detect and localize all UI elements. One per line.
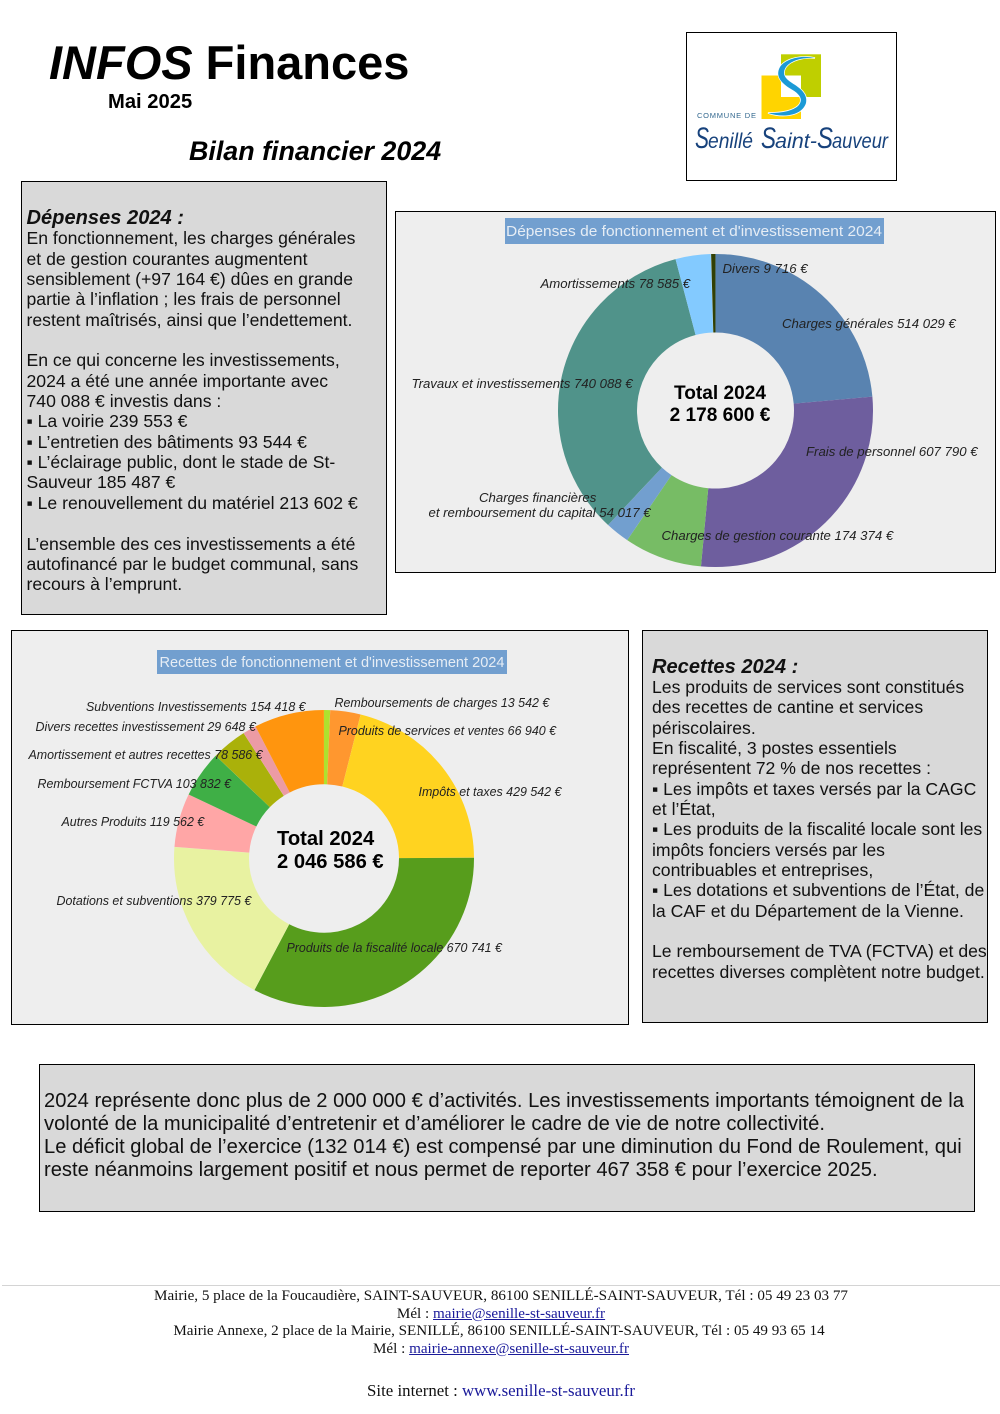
text: recettes: recettes diverses complètent notre budget.: [652, 962, 985, 982]
panel: recettes text: [642, 630, 988, 1023]
logo: aint-: [775, 130, 817, 153]
total: [670, 383, 771, 426]
labels: Frais de personnel 607 790 €: [806, 444, 978, 459]
text: dépenses: Sauveur 185 487 €: [26, 472, 175, 492]
logo: [686, 32, 897, 181]
text: dépenses: En fonctionnement, les charges générales: [26, 228, 355, 248]
panel: dépenses text: [21, 181, 387, 615]
labels: [28, 696, 563, 955]
labels: Amortissement et autres recettes 78 586 €: [28, 748, 264, 762]
text: dépenses: sensiblement (+97 164 €) dûes en grande: [26, 269, 353, 289]
footer: Mél : mairie-annexe@senille-st-sauveur.fr: [373, 1340, 629, 1356]
labels: Charges de gestion courante 174 374 €: [662, 528, 894, 543]
text: dépenses: ▪ L’entretien des bâtiments 93 544 €: [26, 432, 307, 452]
text: dépenses: ▪ La voirie 239 553 €: [26, 411, 187, 431]
text: recettes: des recettes de cantine et services: [652, 697, 923, 717]
total: 2 046 586 €: [277, 851, 384, 873]
footer: [154, 1287, 848, 1400]
text: dépenses: Dépenses 2024 :: [26, 207, 184, 229]
text: recettes: et l’État,: [652, 799, 716, 819]
text: recettes: contribuables et entreprises,: [652, 860, 873, 880]
total: 2 178 600 €: [670, 405, 771, 426]
total: Total 2024: [277, 828, 375, 850]
text: conclusion: Le déficit global de l’exercice (132 014 €) est compensé par une diminution du Fond de Roulement, qui: [44, 1136, 962, 1158]
text: recettes: la CAF et du Département de la Vienne.: [652, 901, 964, 921]
text: dépenses: ▪ Le renouvellement du matériel 213 602 €: [26, 493, 358, 513]
footer: Mairie, 5 place de la Foucaudière, SAINT-SAUVEUR, 86100 SENILLÉ-SAINT-SAUVEUR, Tél : 05 49 23 03 77: [154, 1288, 848, 1304]
text: dépenses: autofinancé par le budget communal, sans: [26, 554, 358, 574]
chart: dépenses: [395, 211, 996, 573]
logo: S: [695, 122, 709, 155]
footer: Site internet : www.senille-st-sauveur.fr: [367, 1380, 635, 1400]
labels: Charges financières: [479, 490, 597, 505]
text: dépenses: ▪ L’éclairage public, dont le stade de St-: [26, 452, 335, 472]
text: dépenses: En ce qui concerne les investissements,: [26, 350, 340, 370]
text: recettes: Les produits de services sont constitués: [652, 677, 964, 697]
title: INFOS Finances: [49, 36, 409, 89]
text: recettes: Le remboursement de TVA (FCTVA) et des: [652, 941, 987, 961]
labels: Charges générales 514 029 €: [782, 316, 956, 331]
donut: [165, 701, 483, 1016]
text: dépenses: et de gestion courantes augmentent: [26, 249, 307, 269]
labels: Produits de services et ventes 66 940 €: [338, 724, 557, 738]
labels: Impôts et taxes 429 542 €: [418, 785, 563, 799]
text: conclusion: [44, 1090, 964, 1181]
text: dépenses: L’ensemble des ces investissements a été: [26, 534, 355, 554]
text: recettes: périscolaires.: [652, 718, 756, 738]
labels: Amortissements 78 585 €: [540, 276, 691, 291]
labels: et remboursement du capital 54 017 €: [428, 505, 651, 520]
text: recettes: En fiscalité, 3 postes essentiels: [652, 738, 897, 758]
logo: S: [761, 122, 776, 155]
labels: Remboursements de charges 13 542 €: [334, 696, 550, 710]
chart title: [505, 218, 884, 244]
labels: Divers 9 716 €: [722, 261, 808, 276]
text: dépenses: restent maîtrisés, ainsi que l’endettement.: [26, 310, 352, 330]
text: recettes: Recettes 2024 :: [652, 656, 798, 678]
text: dépenses: 2024 a été une année importante avec: [26, 371, 328, 391]
logo: enillé: [708, 130, 753, 153]
text: dépenses: [26, 207, 358, 594]
chart title: Dépenses de fonctionnement et d'investissement 2024: [506, 224, 882, 240]
text: dépenses: recours à l’emprunt.: [26, 574, 182, 594]
subtitle: Bilan financier 2024: [189, 136, 441, 166]
text: dépenses: 740 088 € investis dans :: [26, 391, 221, 411]
logo: S: [817, 122, 833, 155]
labels: Divers recettes investissement 29 648 €: [36, 720, 257, 734]
donut: [549, 245, 882, 576]
text: dépenses: partie à l’inflation ; les frais de personnel: [26, 289, 341, 309]
chart title: [157, 650, 507, 674]
date: Mai 2025: [108, 91, 192, 113]
labels: Remboursement FCTVA 103 832 €: [38, 777, 232, 791]
labels: Travaux et investissements 740 088 €: [412, 376, 633, 391]
text: recettes: impôts fonciers versés par les: [652, 840, 885, 860]
labels: Subventions Investissements 154 418 €: [86, 700, 307, 714]
chart: recettes: [11, 630, 629, 1025]
text: conclusion: reste néanmoins largement positif et nous permet de reporter 467 358 € pour l’exercice 2025.: [44, 1159, 878, 1181]
text: recettes: ▪ Les dotations et subventions de l’État, de: [652, 880, 984, 900]
footer: Mél : mairie@senille-st-sauveur.fr: [397, 1306, 605, 1322]
text: recettes: ▪ Les impôts et taxes versés par la CAGC: [652, 779, 976, 799]
text: conclusion: 2024 représente donc plus de 2 000 000 € d’activités. Les investissements importants témoignent de la: [44, 1090, 964, 1112]
chart title: Recettes de fonctionnement et d'investissement 2024: [160, 655, 504, 671]
logo: COMMUNE DE: [697, 111, 756, 120]
labels: Autres Produits 119 562 €: [60, 815, 205, 829]
labels: Produits de la fiscalité locale 670 741 €: [286, 941, 503, 955]
text: recettes: [652, 656, 987, 982]
footer: Mairie Annexe, 2 place de la Mairie, SENILLÉ, 86100 SENILLÉ-SAINT-SAUVEUR, Tél : 05 49 93 65 14: [173, 1323, 825, 1339]
text: recettes: représentent 72 % de nos recettes :: [652, 758, 931, 778]
text: recettes: ▪ Les produits de la fiscalité locale sont les: [652, 819, 982, 839]
panel: conclusion: [39, 1064, 975, 1212]
labels: [412, 261, 978, 543]
logo: auveur: [832, 130, 889, 153]
text: conclusion: volonté de la municipalité d’entretenir et d’améliorer le cadre de vie de notre collectivité.: [44, 1113, 825, 1135]
labels: Dotations et subventions 379 775 €: [56, 894, 252, 908]
total: Total 2024: [674, 383, 766, 404]
total: [277, 828, 384, 873]
